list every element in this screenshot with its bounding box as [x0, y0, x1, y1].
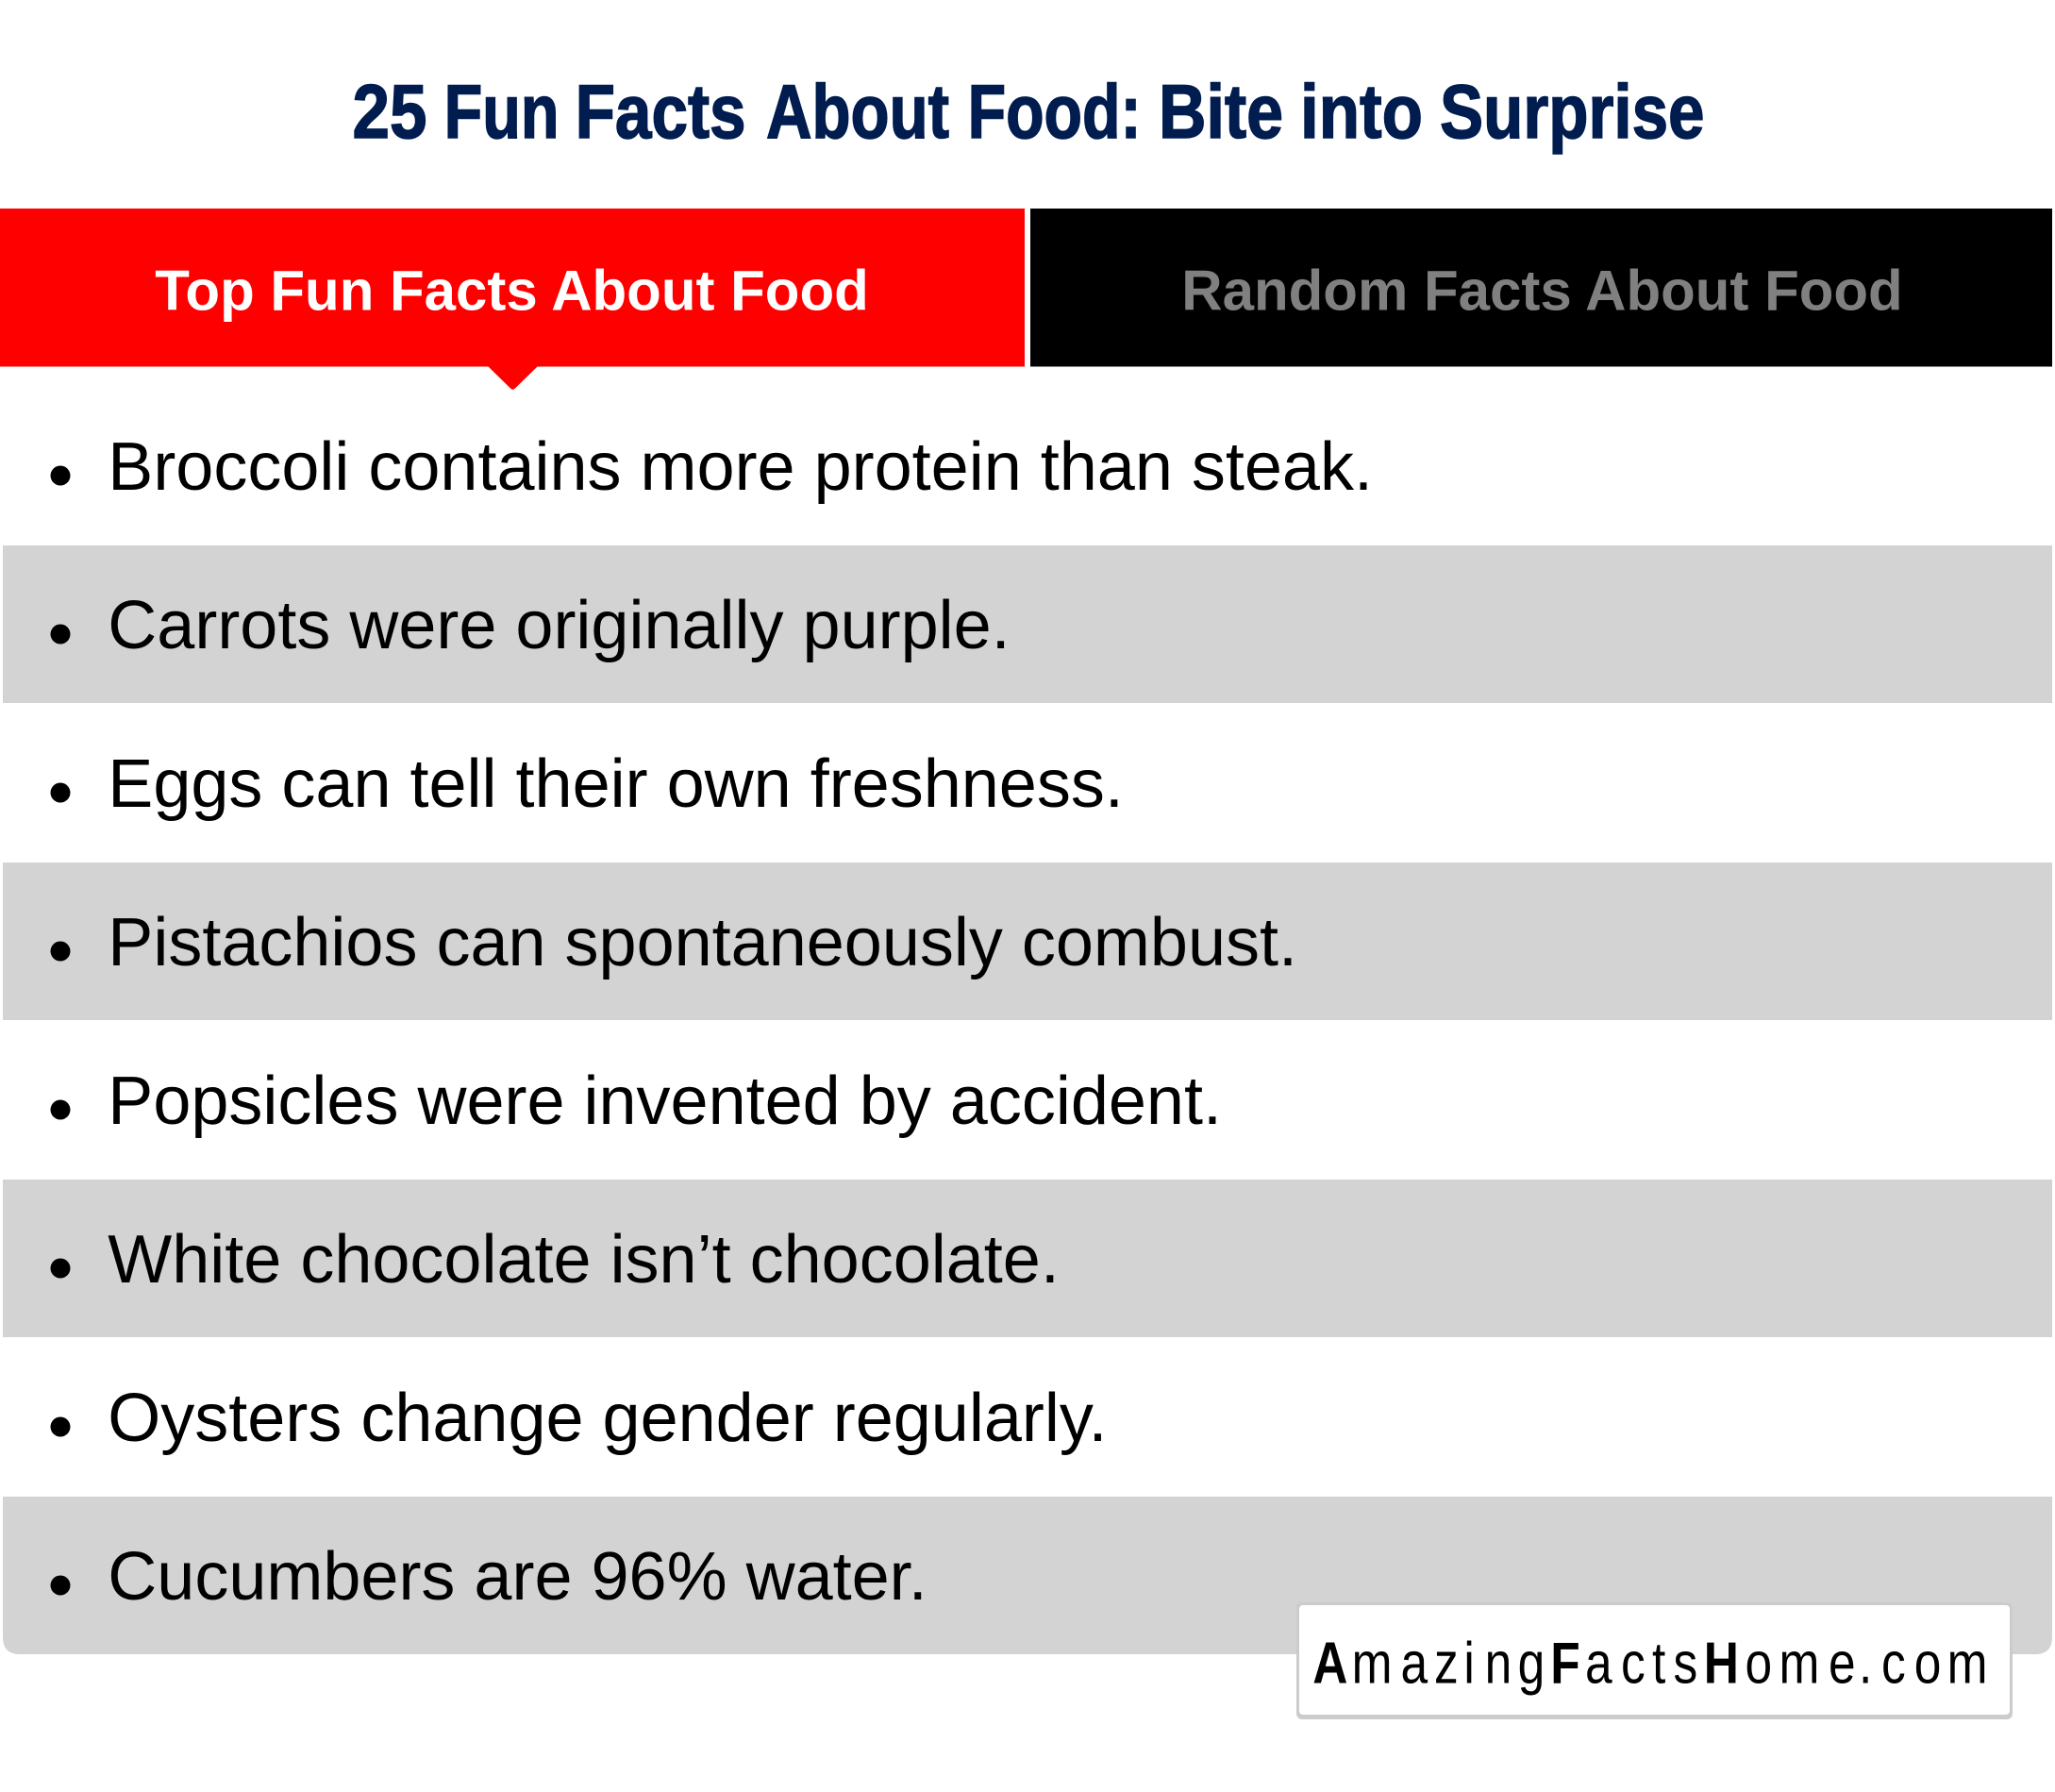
active tab label: Top Fun Facts About Food	[155, 259, 869, 323]
fact row 4: Pistachios can spontaneously combust.	[108, 905, 1297, 980]
active tab: top fun facts	[0, 209, 1025, 390]
title: Surprise	[1440, 70, 1704, 155]
fact row 1: Broccoli contains more protein than steak.	[108, 429, 1373, 505]
inactive tab label: Random Facts About Food	[1181, 259, 1903, 323]
title: Bite	[1159, 70, 1283, 155]
fact row 6: White chocolate isn’t chocolate.	[108, 1222, 1060, 1298]
inactive tab: random facts	[1030, 209, 2052, 366]
title: Food:	[968, 70, 1142, 155]
website stamp text: mazing	[1352, 1631, 1545, 1697]
fact row 2: Carrots were originally purple.	[108, 588, 1011, 663]
website stamp text: acts	[1585, 1631, 1697, 1697]
fact row 8: Cucumbers are 96% water.	[108, 1539, 927, 1615]
fact row 5: Popsicles were invented by accident.	[108, 1063, 1222, 1139]
fact row 3: Eggs can tell their own freshness.	[108, 746, 1124, 822]
title: Facts	[576, 70, 746, 155]
title: Fun	[444, 70, 560, 155]
website stamp text: F	[1550, 1631, 1580, 1697]
title: into	[1300, 70, 1423, 155]
website stamp	[1296, 1602, 2013, 1719]
fact row 4	[3, 863, 2052, 1020]
fact row 2	[3, 545, 2052, 703]
title: About	[766, 70, 949, 155]
icon: active tab pointer	[488, 366, 538, 390]
title: 25	[353, 70, 426, 155]
fact row 8	[3, 1497, 2052, 1654]
fact row 6	[3, 1180, 2052, 1337]
title	[353, 70, 1704, 155]
website stamp text: A	[1312, 1631, 1347, 1697]
website stamp text: ome.com	[1745, 1631, 1987, 1697]
website stamp text: H	[1704, 1631, 1739, 1697]
fact row 7: Oysters change gender regularly.	[108, 1381, 1108, 1456]
